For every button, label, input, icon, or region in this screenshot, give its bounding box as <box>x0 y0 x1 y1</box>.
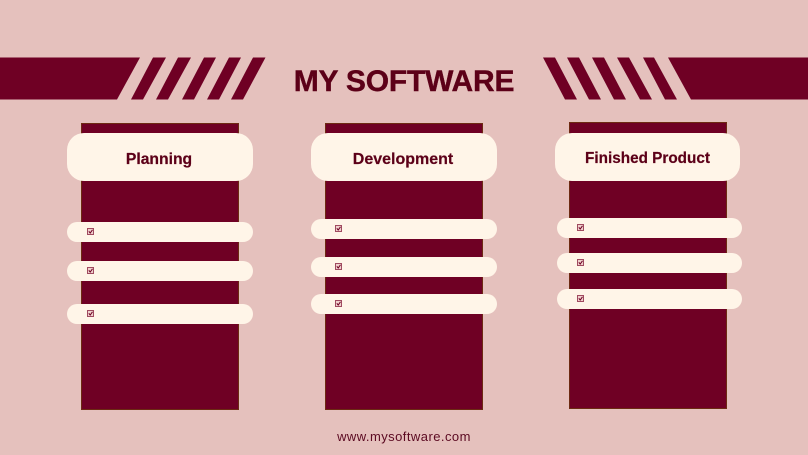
development item 1 <box>311 219 497 239</box>
planning item 2 <box>67 261 253 281</box>
header banner <box>0 58 808 100</box>
finished product heading <box>555 133 740 181</box>
development heading: Development <box>353 151 453 168</box>
planning item 1 <box>67 222 253 242</box>
finished product item 1 <box>557 218 742 238</box>
finished product item 3 <box>557 289 742 309</box>
planning item 3 <box>67 304 253 324</box>
website footer: www.mysoftware.com <box>337 429 471 444</box>
finished product column <box>569 122 726 409</box>
finished product item 2 <box>557 253 742 273</box>
title: MY SOFTWARE <box>294 65 514 98</box>
development item 3 <box>311 294 497 314</box>
planning heading <box>67 133 253 181</box>
planning column <box>81 123 238 410</box>
development column <box>325 123 482 410</box>
development heading <box>311 133 497 181</box>
development item 2 <box>311 257 497 277</box>
finished product heading: Finished Product <box>585 150 710 167</box>
planning heading: Planning <box>126 151 192 168</box>
